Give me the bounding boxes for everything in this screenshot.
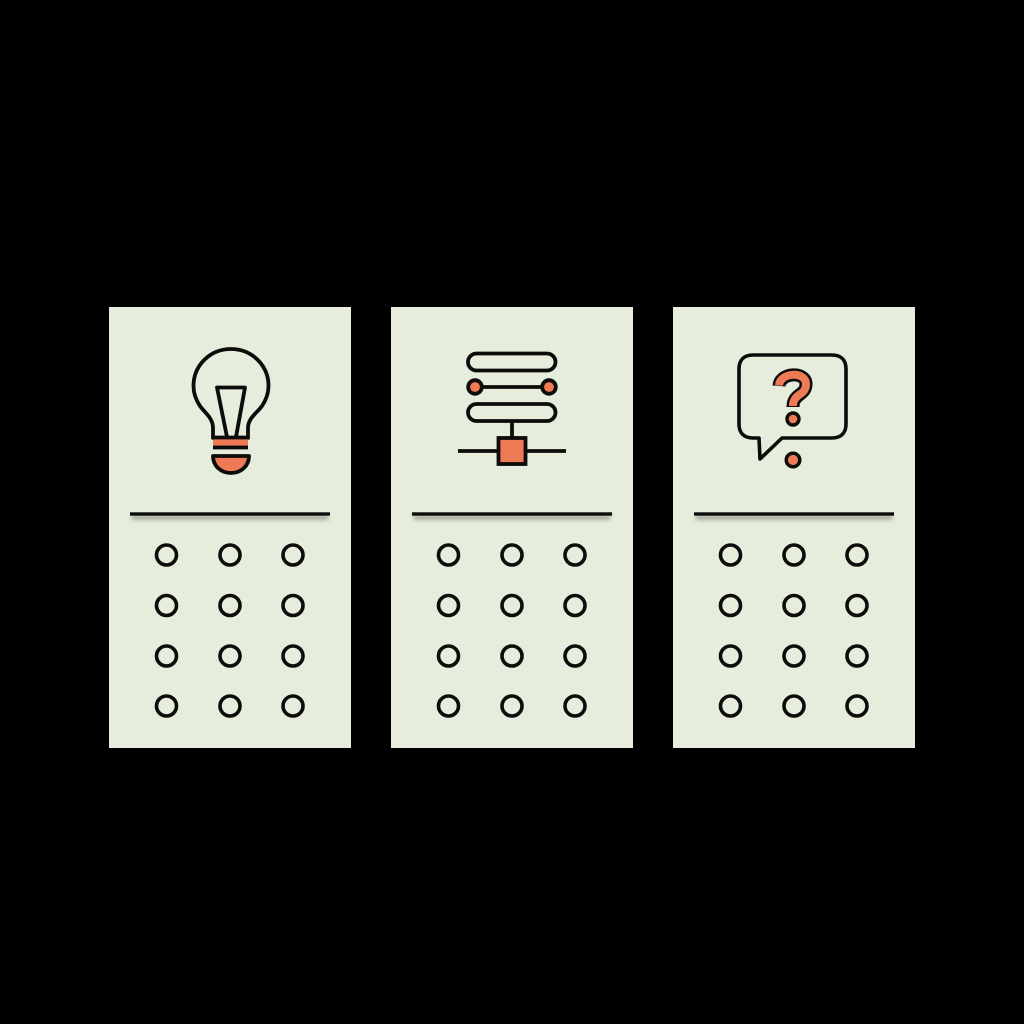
dot grid <box>720 545 867 716</box>
icon: server network <box>458 354 566 464</box>
dot grid <box>156 545 303 716</box>
icon: speech bubble with question mark <box>739 355 846 467</box>
icon: lightbulb <box>194 349 268 473</box>
panel: server diagram card <box>391 307 633 748</box>
dot grid <box>438 545 585 716</box>
panel: lightbulb card <box>109 307 351 748</box>
divider <box>130 512 330 519</box>
divider <box>412 512 612 519</box>
divider <box>694 512 894 519</box>
panel: question bubble card <box>673 307 915 748</box>
